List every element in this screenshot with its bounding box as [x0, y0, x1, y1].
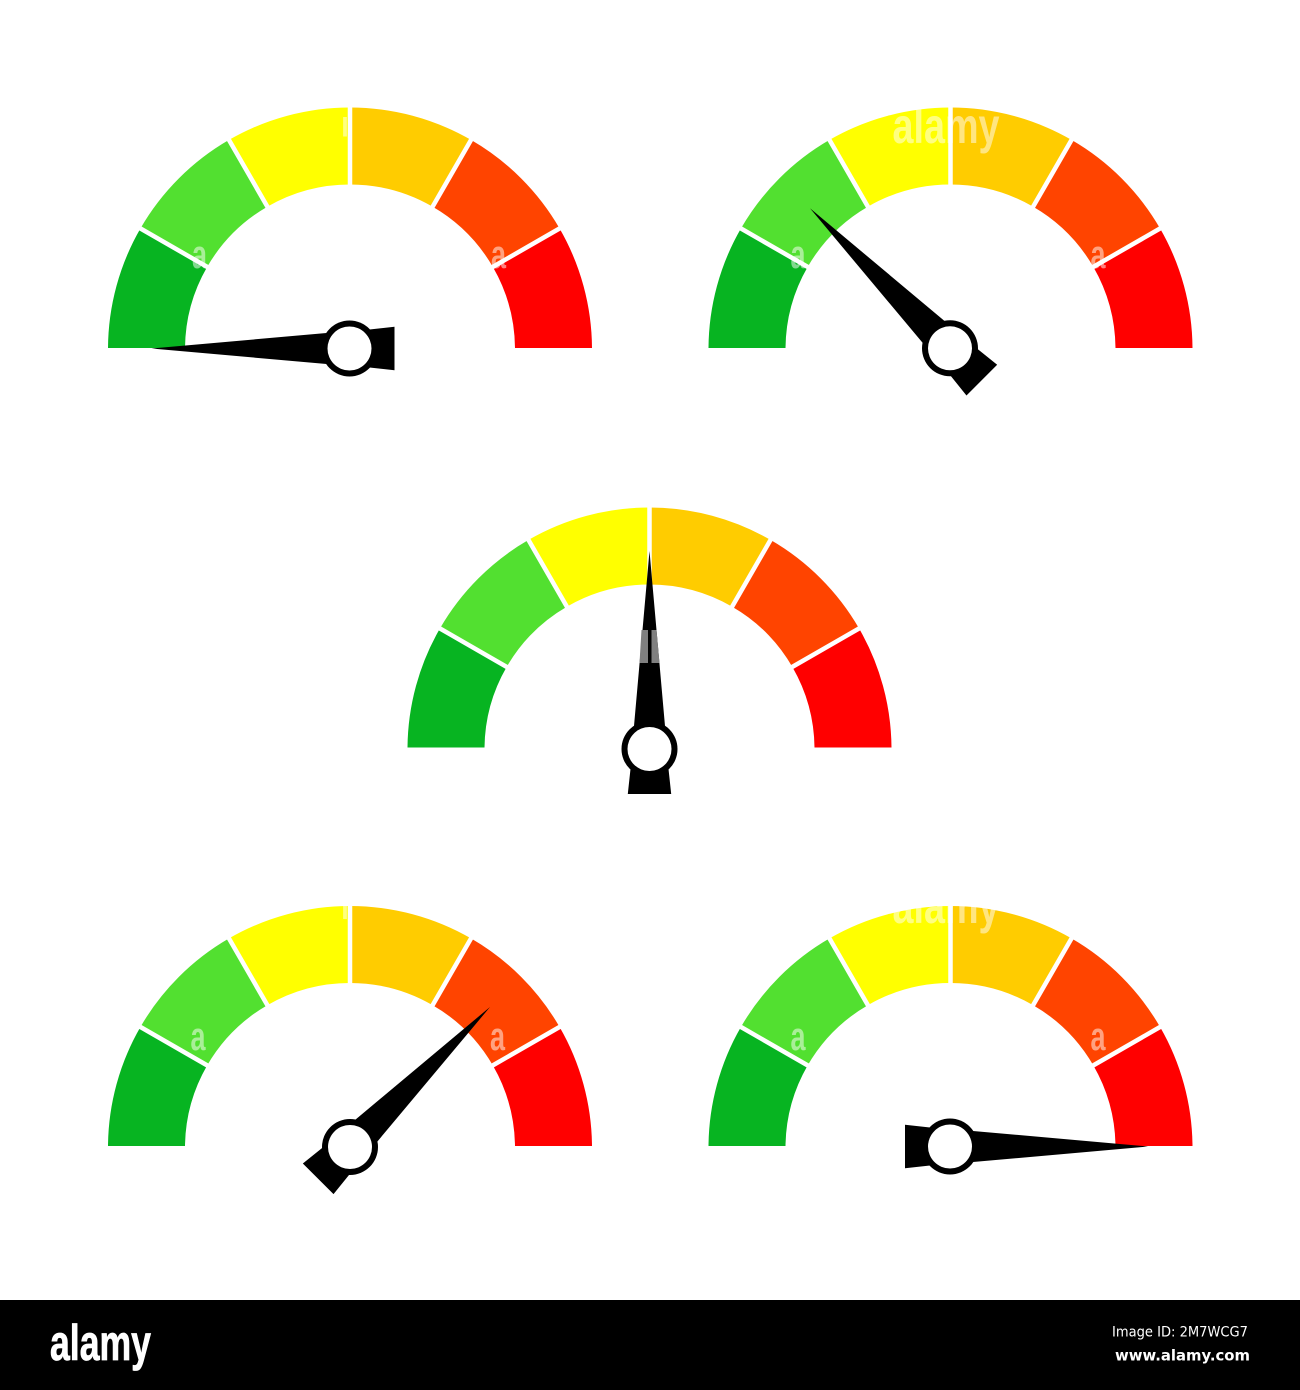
gauge 4: needle in orange-red zone: a [190, 1015, 206, 1059]
gauge 5: needle at far right: a [790, 1015, 806, 1059]
gauge 2: needle in light green zone [708, 98, 1192, 400]
gauge 3: needle at centre [408, 504, 892, 794]
image id: Image ID: 2M7WCG7 [1112, 1325, 1248, 1341]
gauge 2: needle in light green zone: a [1090, 233, 1106, 277]
gauge 1: needle at far left: a [491, 233, 507, 277]
gauge 2: needle in light green zone: alamy [892, 98, 1000, 154]
website: www.alamy.com [1115, 1347, 1250, 1365]
needle 1 [152, 320, 394, 376]
needle 4 [298, 987, 510, 1199]
gauge 5: needle at far right: a [1090, 1015, 1106, 1059]
footer bar [0, 1300, 1300, 1390]
gauge 4: needle in orange-red zone: a [490, 1015, 506, 1059]
gauge 1: needle at far left: a [192, 233, 208, 277]
needle 3 [622, 551, 678, 794]
gauge 5: needle at far right [708, 878, 1192, 1174]
footer logo: alamy [50, 1315, 151, 1371]
gauge 1: needle at far left [108, 104, 592, 376]
gauge 2: needle in light green zone: a [790, 233, 806, 277]
gauge 5: needle at far right: alamy [892, 878, 1000, 934]
needle 2 [790, 188, 1002, 400]
needle 5 [905, 1118, 1148, 1174]
gauge 4: needle in orange-red zone [108, 895, 592, 1199]
gauge 1: needle at far left: l [341, 112, 349, 142]
gauge 4: needle in orange-red zone: l [341, 895, 349, 925]
